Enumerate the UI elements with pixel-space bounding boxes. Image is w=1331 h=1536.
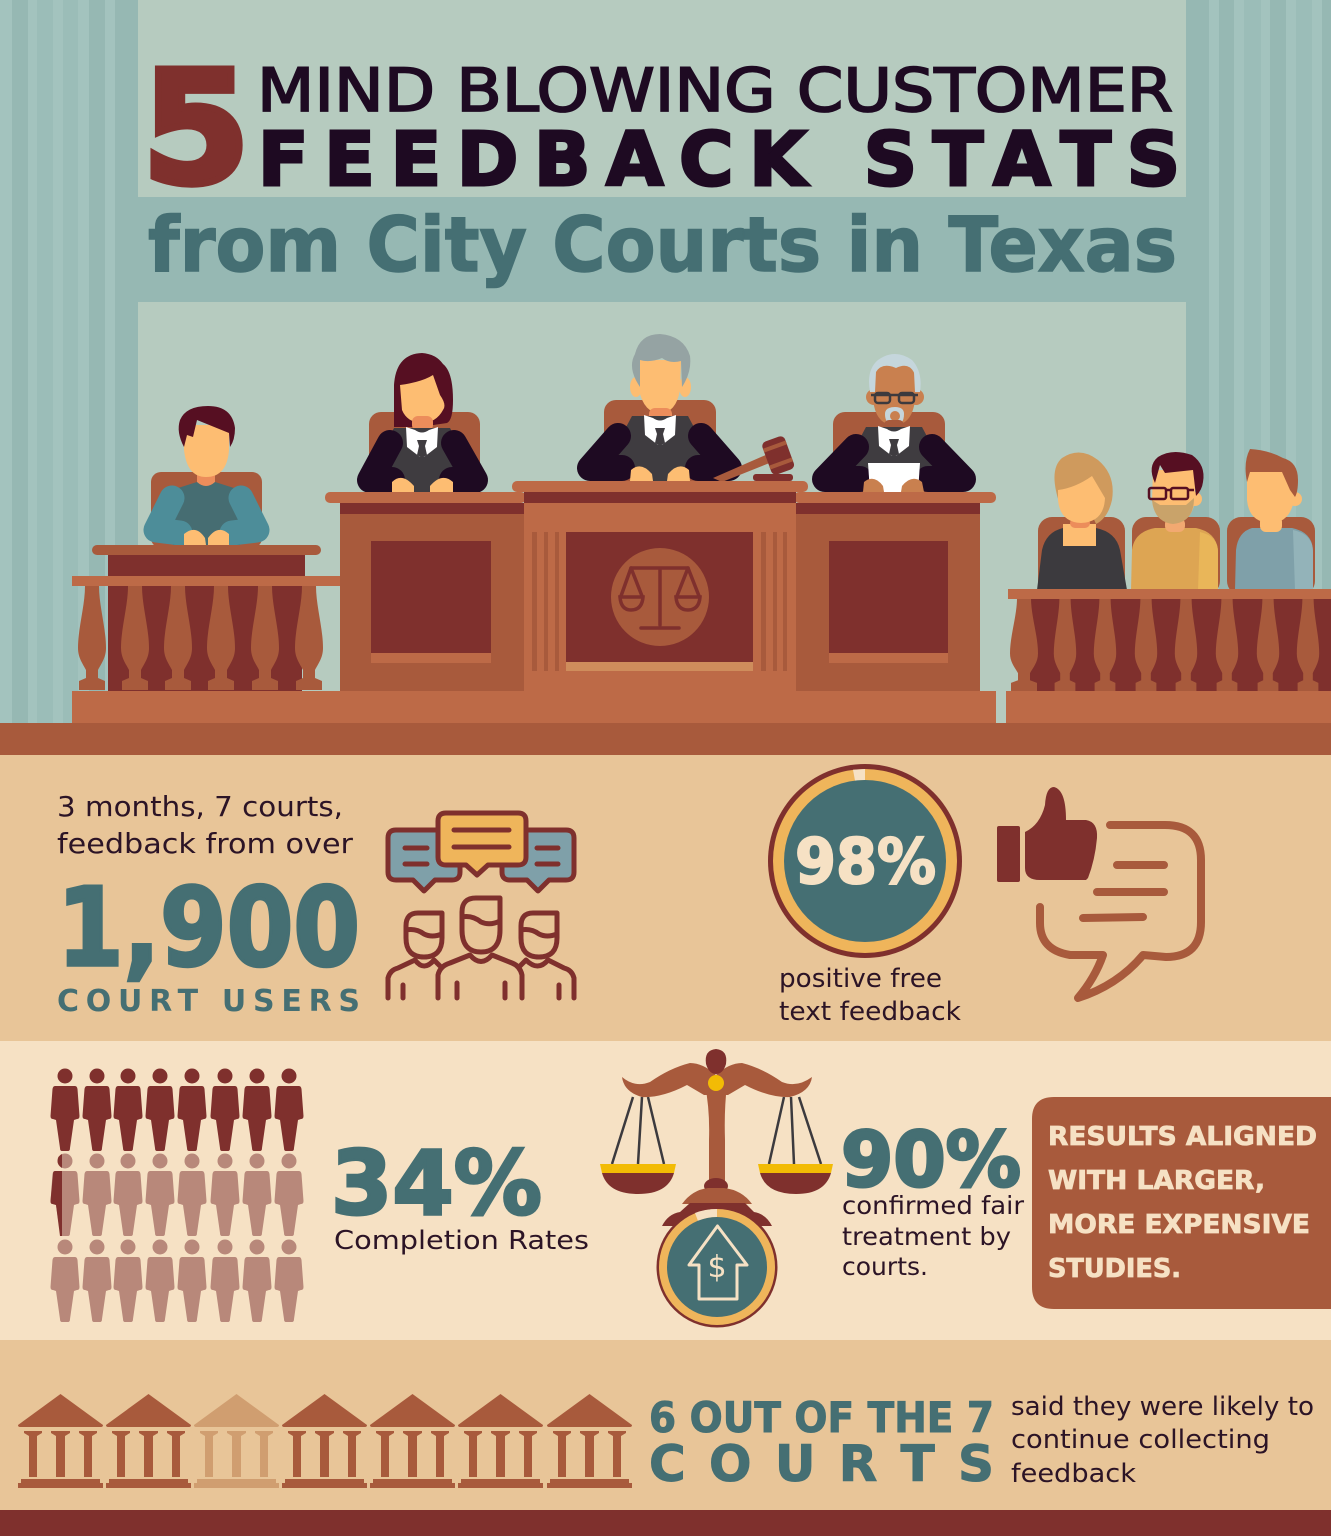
- judge: older man with glasses and papers: [825, 354, 963, 493]
- stat: 34%: 34%: [331, 1132, 542, 1235]
- text: positive free text feedback: positive free: [779, 964, 942, 994]
- text: completion rates: Completion Rates: [334, 1226, 589, 1256]
- icon: three people with speech bubbles: [388, 813, 574, 998]
- stat: 98% circle: 98%: [795, 825, 936, 898]
- footer bar: [0, 1510, 1331, 1536]
- text: confirmed fair treatment: confirmed fair: [842, 1191, 1025, 1220]
- panel: row 1: [0, 755, 1331, 1041]
- callout: results aligned: [1032, 1097, 1331, 1309]
- gavel: [713, 435, 795, 482]
- icon: thumbs up with speech bubble: [997, 787, 1201, 998]
- text: likely to continue: [1011, 1392, 1314, 1489]
- pictogram: seven court buildings: [18, 1394, 632, 1488]
- text: 3 months, 7 courts: [57, 790, 354, 860]
- callout: results aligned: STUDIES.: [1048, 1254, 1181, 1284]
- panel: row 3: [0, 1340, 1331, 1510]
- text: confirmed fair treatment: courts.: [842, 1252, 928, 1281]
- railing: audience: [1006, 589, 1331, 723]
- audience: young man: [1227, 449, 1315, 595]
- audience: man with glasses and beard: [1131, 452, 1220, 595]
- heading: 6 out of the 7 courts: C O U R T S: [649, 1435, 994, 1493]
- icon: balance scale with dollar house: $: [707, 1250, 727, 1285]
- text: positive free text feedback: text feedback: [779, 997, 961, 1027]
- title line 1: MIND BLOWING CUSTOMER: [257, 56, 1173, 126]
- heading: 6 out of the 7 courts: [649, 1393, 994, 1493]
- pictogram: 34 percent of people: [50, 1068, 304, 1322]
- floor: [0, 723, 1331, 755]
- background: courtroom wall and curtains: [0, 0, 1331, 730]
- audience: woman: [1037, 452, 1127, 595]
- text: positive free text feedback: [779, 964, 961, 1027]
- title: [142, 38, 1180, 289]
- railing: clerk: [72, 545, 340, 691]
- callout: results aligned: RESULTS ALIGNED: [1048, 1122, 1317, 1152]
- judge: woman: [369, 353, 480, 493]
- text: 3 months, 7 courts: 3 months, 7 courts,: [57, 790, 343, 823]
- heading: 6 out of the 7 courts: 6 OUT OF THE 7: [649, 1393, 994, 1442]
- clerk at left desk: [151, 406, 262, 548]
- icon: scales emblem: [611, 548, 709, 646]
- panel: row 2: [0, 1041, 1331, 1340]
- label: court users: COURT USERS: [57, 984, 360, 1019]
- callout: results aligned: WITH LARGER,: [1048, 1166, 1265, 1196]
- title numeral 5: 5: [142, 38, 250, 219]
- stat: 90%: 90%: [841, 1115, 1021, 1204]
- callout: results aligned: MORE EXPENSIVE: [1048, 1210, 1310, 1240]
- illustration: courtroom: [0, 334, 1331, 755]
- stat: 98% circle: [768, 764, 962, 958]
- text: likely to continue: feedback: [1011, 1459, 1136, 1489]
- text: likely to continue: said they were likely to: [1011, 1392, 1314, 1422]
- judge: presiding, grey hair: [590, 334, 729, 481]
- title line 2: FEEDBACK STATS: [258, 117, 1180, 203]
- text: likely to continue: continue collecting: [1011, 1425, 1270, 1455]
- bench: side desks and centre desk: [72, 481, 996, 723]
- text: 3 months, 7 courts: feedback from over: [57, 827, 354, 860]
- text: confirmed fair treatment: [842, 1191, 1025, 1281]
- stat: 1,900: 1,900: [57, 866, 360, 991]
- text: confirmed fair treatment: treatment by: [842, 1222, 1011, 1251]
- icon: balance scale with dollar house: [600, 1049, 833, 1328]
- subtitle: from City Courts in Texas: [148, 200, 1177, 289]
